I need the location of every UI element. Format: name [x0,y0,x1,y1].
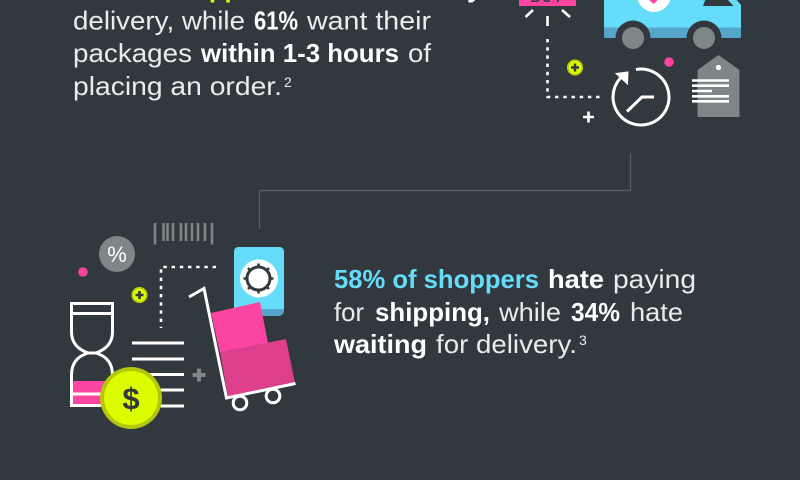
icon: grey plus [192,368,206,382]
text block: same-day delivery statistic: placing an order. [73,71,282,101]
text block: shipping cost statistic: hate [548,264,604,294]
text block: same-day delivery statistic: of [408,38,432,68]
text block: same-day delivery statistic [73,0,483,101]
icon: pink dot, lower [78,267,88,277]
icon: buy sign [519,0,576,26]
icon: price tag [692,55,740,117]
text block: shipping cost statistic: for delivery. [436,329,577,359]
icon: delivery van [604,0,741,56]
icon: barcode [155,223,212,244]
text block: same-day delivery statistic: want their [306,6,431,36]
icon: percent badge [99,236,135,272]
text block: shipping cost statistic: 3 [579,332,587,348]
text block: shipping cost statistic: while [498,297,561,327]
icon: percent badge: % [107,242,127,267]
text block: shipping cost statistic: waiting [333,329,427,359]
text block: shipping cost statistic [333,264,696,359]
icon: phone with gear [234,247,284,316]
icon: lime plus badge, upper [567,60,583,76]
icon: dollar coin [100,367,162,429]
text block: same-day delivery statistic: 61% [254,6,298,36]
text block: shipping cost statistic: for [334,297,364,327]
connector line between sections [260,153,630,229]
icon: hourglass [71,304,113,406]
dotted connector: phone to list [161,267,216,328]
icon: white plus [583,112,594,122]
text block: same-day delivery statistic: packages [73,38,192,68]
dotted connector: buy sign to clock [548,39,602,97]
text block: shipping cost statistic: paying [613,264,696,294]
text block: same-day delivery statistic: 2 [284,74,292,90]
icon: lime plus badge, lower [132,287,148,303]
text block: shipping cost statistic: 58% of shoppers [334,264,539,294]
icon: list lines [132,343,184,406]
icon: clock with arrow [613,69,669,125]
icon: dollar coin: $ [122,381,140,416]
icon: shopping cart with boxes [189,288,296,410]
text block: shipping cost statistic: 34% [571,297,620,327]
text block: shipping cost statistic: hate [630,297,683,327]
text block: same-day delivery statistic: within 1-3 hours [200,38,399,68]
text block: same-day delivery statistic: delivery, while [73,6,245,36]
text block: shipping cost statistic: shipping, [375,297,490,327]
icon: pink dot, upper [664,57,674,67]
